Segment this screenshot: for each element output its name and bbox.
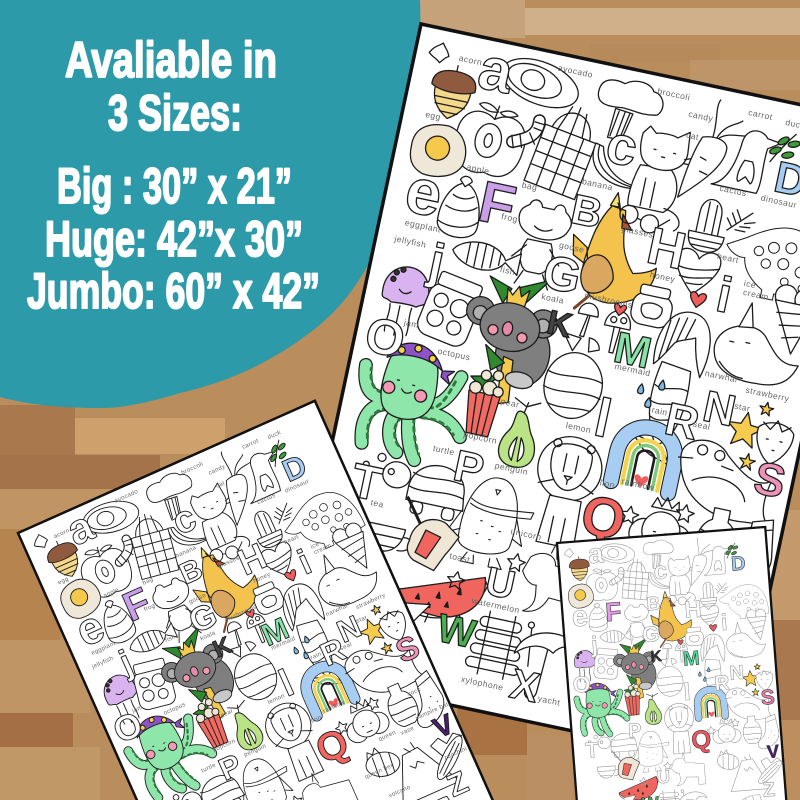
poster word labels: jellyfish — [393, 233, 427, 250]
poster word labels: vase — [691, 565, 713, 579]
left poster word labels: star — [356, 615, 368, 625]
poster letters: M — [610, 323, 656, 378]
left poster letters: F — [116, 578, 157, 630]
small poster letters: H — [684, 597, 703, 624]
poster word labels: lemon — [565, 420, 592, 435]
small poster letters: O — [572, 670, 591, 698]
poster word labels: honey — [649, 269, 677, 284]
small poster letters — [562, 525, 783, 800]
poster word labels: strawberry — [745, 385, 791, 404]
icon: glasses — [613, 203, 671, 237]
poster word labels: vampire bat — [721, 561, 772, 581]
icon: outline stars and bubbles — [342, 437, 696, 634]
left poster word labels: jellyfish — [90, 656, 115, 671]
left poster letters: B — [175, 552, 208, 591]
icon: cactus — [685, 196, 731, 255]
poster letters: F — [473, 169, 521, 240]
icon: seal — [668, 435, 785, 528]
poster word labels: unicorn — [510, 526, 543, 542]
poster word labels — [305, 37, 800, 745]
left poster letters: H — [232, 535, 273, 583]
small poster letters: K — [650, 648, 663, 666]
poster letters: V — [729, 574, 765, 623]
small poster letters: R — [714, 671, 730, 696]
icon: turtle — [376, 454, 471, 523]
left poster letters: i — [292, 542, 317, 582]
poster letters: W — [433, 606, 480, 657]
poster word labels: toast — [449, 551, 471, 565]
left poster word labels: zucchini — [443, 746, 468, 762]
poster word labels: broccoli — [657, 86, 691, 102]
left poster word labels: mermaid — [271, 636, 297, 652]
left poster word labels: broccoli — [181, 461, 204, 476]
icon: xylophone — [463, 608, 537, 684]
icon: fish — [450, 237, 522, 277]
heading: sizes — [27, 32, 320, 319]
icon: honey jar — [629, 283, 676, 330]
poster letters: O — [360, 306, 410, 369]
icon: yellow stars — [719, 395, 775, 472]
heading: sizes: 3 Sizes: — [108, 85, 242, 141]
left poster word labels: cream — [313, 543, 333, 556]
poster word labels: penguin — [494, 460, 529, 477]
icon: queen — [626, 491, 698, 558]
icon: oak leaf — [428, 41, 451, 64]
poster word labels: dinosaur — [760, 193, 798, 210]
poster word labels: banana — [581, 176, 614, 192]
small poster letters: Q — [690, 725, 712, 755]
left poster word labels: pear — [220, 708, 235, 719]
poster word labels: star — [733, 401, 751, 414]
left poster word labels: jam — [131, 705, 144, 715]
poster: left — [17, 399, 506, 800]
poster letters: U — [482, 559, 519, 608]
left poster word labels: lemon — [267, 693, 286, 706]
poster word labels: tea — [370, 497, 385, 510]
poster word labels: sock — [731, 527, 753, 541]
left poster word labels: rain — [310, 651, 323, 661]
left poster word labels — [33, 409, 474, 800]
poster letters: j — [423, 232, 450, 290]
poster word labels: watermelon — [470, 595, 521, 615]
poster word labels: lion — [599, 477, 616, 490]
icon: banana — [587, 143, 651, 191]
left poster word labels: octopus — [163, 702, 187, 717]
left poster letters: V — [428, 708, 459, 745]
left poster letters: D — [277, 448, 312, 489]
icon: strawberry — [751, 417, 796, 468]
icon: narwhal — [709, 297, 800, 392]
poster word labels: fish — [499, 264, 516, 277]
poster word labels: cream — [742, 287, 770, 302]
icon: sprig — [725, 208, 757, 235]
poster word labels: apple — [466, 162, 491, 176]
poster word labels: cactus — [719, 183, 748, 198]
poster letters — [296, 22, 800, 753]
poster: big — [284, 20, 800, 765]
poster letters: S — [750, 451, 790, 508]
left poster word labels: avocado — [114, 489, 140, 505]
left poster letters: O — [107, 704, 149, 751]
left poster word labels: seal — [339, 642, 353, 652]
small poster letters: U — [656, 767, 671, 788]
left poster word labels: cat — [215, 480, 226, 490]
small poster letters: i — [720, 609, 728, 635]
left poster word labels: egg — [57, 576, 70, 586]
small poster letters: l — [683, 679, 692, 706]
left poster letters: c — [166, 496, 203, 544]
icon: unicorn — [514, 537, 600, 624]
poster word labels: seal — [692, 418, 711, 432]
small poster letters: e — [571, 601, 589, 634]
left poster letters: l — [273, 662, 300, 705]
left poster word labels: heart — [283, 534, 300, 546]
left poster word labels: rainbow — [322, 700, 347, 715]
left poster word labels: apple — [103, 587, 121, 599]
poster word labels: volcano — [626, 627, 660, 644]
poster word labels: zucchini — [720, 630, 756, 647]
icon: octopus — [349, 334, 477, 468]
icon: fried egg — [406, 119, 471, 182]
icon: broccoli — [590, 74, 667, 147]
left poster word labels: bag — [142, 577, 154, 587]
poster letters: P — [449, 441, 488, 495]
poster word labels: heart — [716, 251, 740, 265]
poster letters: T — [346, 454, 386, 512]
left poster word labels: eggplant — [91, 641, 117, 657]
poster word labels: rainbow — [621, 476, 656, 493]
poster letters: Z — [697, 649, 733, 703]
left poster word labels: candy — [208, 464, 227, 477]
left poster word labels: vampire bat — [415, 702, 450, 722]
poster word labels: candy — [688, 109, 715, 124]
icon: pizza slice — [398, 599, 430, 628]
icon: shopping bag — [524, 98, 606, 200]
poster word labels: ice — [743, 278, 757, 290]
poster word labels: egg — [425, 109, 442, 122]
icon: ice cream — [764, 283, 800, 357]
left poster word labels: honey — [253, 572, 272, 585]
poster word labels: yacht — [537, 693, 561, 708]
poster: small — [557, 525, 789, 800]
poster word labels: koala — [541, 291, 565, 306]
poster letters: i — [712, 266, 737, 324]
icon: lion — [522, 431, 608, 552]
left poster word labels: popcorn — [212, 738, 237, 754]
poster artwork — [302, 32, 800, 743]
left poster word labels: sock — [407, 687, 423, 698]
heading: sizes: Jumbo: 60” x 42” — [27, 263, 320, 319]
poster letters: a — [473, 34, 520, 106]
icon: green sprig — [766, 130, 800, 167]
poster letters: c — [601, 114, 643, 179]
poster letters: X — [506, 660, 543, 711]
left poster word labels: ice — [310, 541, 321, 551]
small poster letters: j — [589, 631, 599, 658]
icon: jam jar — [414, 269, 487, 350]
poster word labels: carrot — [747, 107, 774, 122]
left poster word labels: queen bee — [364, 762, 396, 781]
left poster word labels: turtle — [201, 763, 217, 774]
poster word labels: narwhal — [704, 368, 739, 384]
small poster letters: D — [730, 553, 746, 576]
icon: tea cup — [361, 490, 426, 558]
poster word labels: jam — [402, 317, 420, 330]
left poster letters: j — [112, 642, 139, 683]
icon: zucchini — [693, 614, 763, 664]
poster letters: N — [699, 382, 740, 436]
icon: volcano — [634, 580, 737, 674]
icon: rainbow — [611, 422, 681, 493]
poster word labels: rain — [651, 405, 669, 418]
poster letters: H — [642, 217, 691, 281]
small poster letters: M — [682, 647, 701, 671]
left poster letters: G — [183, 596, 223, 641]
small poster letters: S — [760, 686, 776, 710]
heading: sizes: Big : 30” x 21” — [57, 158, 292, 214]
poster word labels: eggplant — [404, 217, 442, 235]
left poster word labels: duck — [267, 430, 283, 441]
left poster word labels: penguin — [243, 743, 267, 759]
left poster word labels: queen — [378, 730, 397, 743]
left poster word labels: banana — [175, 545, 198, 560]
left poster word labels: narwhal — [325, 603, 349, 618]
heading: sizes: Avaliable in — [65, 32, 277, 88]
icon: rain drops — [635, 375, 666, 410]
icon: worm — [509, 116, 546, 154]
left poster word labels: frog — [143, 603, 156, 613]
small poster letters: B — [646, 593, 661, 615]
poster word labels: acorn — [458, 53, 483, 67]
left poster word labels: mushrooms — [224, 604, 258, 624]
icon: goose outline — [711, 124, 783, 196]
icon: apple — [449, 98, 532, 181]
icon: umbrella — [506, 626, 583, 707]
poster word labels: mermaid — [614, 361, 652, 378]
poster word labels: avocado — [557, 63, 594, 80]
poster letters: K — [544, 303, 576, 346]
left poster word labels: glasses — [217, 555, 241, 570]
poster letters: B — [567, 185, 606, 237]
left poster word labels: volcano — [388, 784, 412, 799]
left poster word labels: fish — [165, 634, 177, 644]
poster letters: e — [399, 153, 449, 231]
icon: red heart — [688, 291, 707, 309]
icon: popcorn — [460, 366, 507, 438]
poster letters: Q — [576, 482, 631, 553]
left poster letters: S — [390, 628, 425, 670]
small poster letters: P — [627, 720, 642, 743]
icon: eggplant — [435, 172, 487, 241]
icon: jellyfish — [374, 263, 434, 341]
left poster letters: K — [209, 632, 236, 664]
icon: lemon — [538, 331, 612, 424]
left poster word labels: cactus — [256, 493, 277, 506]
icon: sock — [718, 512, 780, 594]
icon: queen bee — [614, 560, 678, 619]
icon: watermelon — [392, 560, 489, 633]
left poster word labels: koala — [200, 630, 217, 642]
poster word labels: goose — [558, 240, 585, 255]
icon: koala — [449, 265, 566, 413]
poster letters: l — [589, 388, 617, 449]
heading: sizes: Huge: 42”x 30” — [45, 211, 303, 267]
small poster letters: N — [729, 662, 745, 685]
small poster letters: V — [766, 741, 780, 762]
left poster word labels: strawberry — [355, 593, 387, 611]
icon: yellow duck — [559, 185, 670, 323]
left poster letters: P — [213, 747, 247, 788]
poster word labels: turtle — [432, 443, 456, 457]
icon: toast — [404, 515, 462, 574]
icon: small heart — [613, 303, 627, 317]
icon: cat — [623, 123, 702, 233]
icon: acorn — [425, 61, 480, 123]
icon: mermaid — [628, 306, 716, 468]
icon: vase — [691, 505, 742, 572]
icon: avocado — [495, 49, 585, 118]
icon: striped heart — [670, 246, 723, 299]
small poster letters: F — [604, 596, 623, 627]
poster word labels: queen — [661, 554, 689, 569]
poster word labels: xylophone — [460, 674, 504, 693]
icon: carrot — [678, 95, 752, 208]
left poster word labels: goose — [188, 593, 208, 606]
poster word labels: pear — [500, 396, 521, 410]
small poster letters: T — [584, 737, 600, 763]
left poster word labels: lion — [310, 715, 323, 725]
left poster letters: R — [315, 631, 351, 673]
icon: vampire bat — [711, 604, 762, 643]
left poster letters: M — [256, 611, 294, 653]
poster word labels: frog — [500, 211, 519, 224]
left poster letters: Q — [309, 720, 355, 773]
left poster letters: e — [68, 600, 112, 657]
poster word labels: mushrooms — [584, 290, 634, 310]
poster letters: G — [538, 245, 586, 305]
icon: pear — [495, 397, 545, 471]
poster letters: R — [661, 392, 704, 450]
left poster letters: a — [60, 503, 101, 555]
icon: mushrooms — [572, 301, 634, 356]
poster word labels: octopus — [437, 346, 471, 362]
left poster letters — [24, 402, 483, 800]
left poster word labels: carrot — [241, 438, 260, 451]
teal size banner — [0, 0, 420, 408]
left poster word labels: vase — [400, 725, 416, 737]
poster word labels: popcorn — [463, 429, 498, 446]
poster word labels: bag — [521, 180, 538, 193]
icon: zebra — [619, 667, 700, 725]
small poster letters: G — [641, 621, 660, 647]
small poster letters: a — [587, 537, 605, 569]
poster word labels: cat — [685, 130, 700, 142]
left poster word labels: acorn — [53, 528, 71, 540]
left poster word labels: dinosaur — [284, 479, 310, 495]
small poster letters: c — [653, 557, 668, 585]
poster word labels: queen bee — [614, 586, 660, 605]
icon: dinosaur — [717, 216, 800, 312]
left poster letters: N — [332, 609, 366, 650]
icon: penguin — [440, 470, 539, 574]
poster word labels: glasses — [621, 223, 654, 240]
icon: frog — [505, 197, 575, 292]
